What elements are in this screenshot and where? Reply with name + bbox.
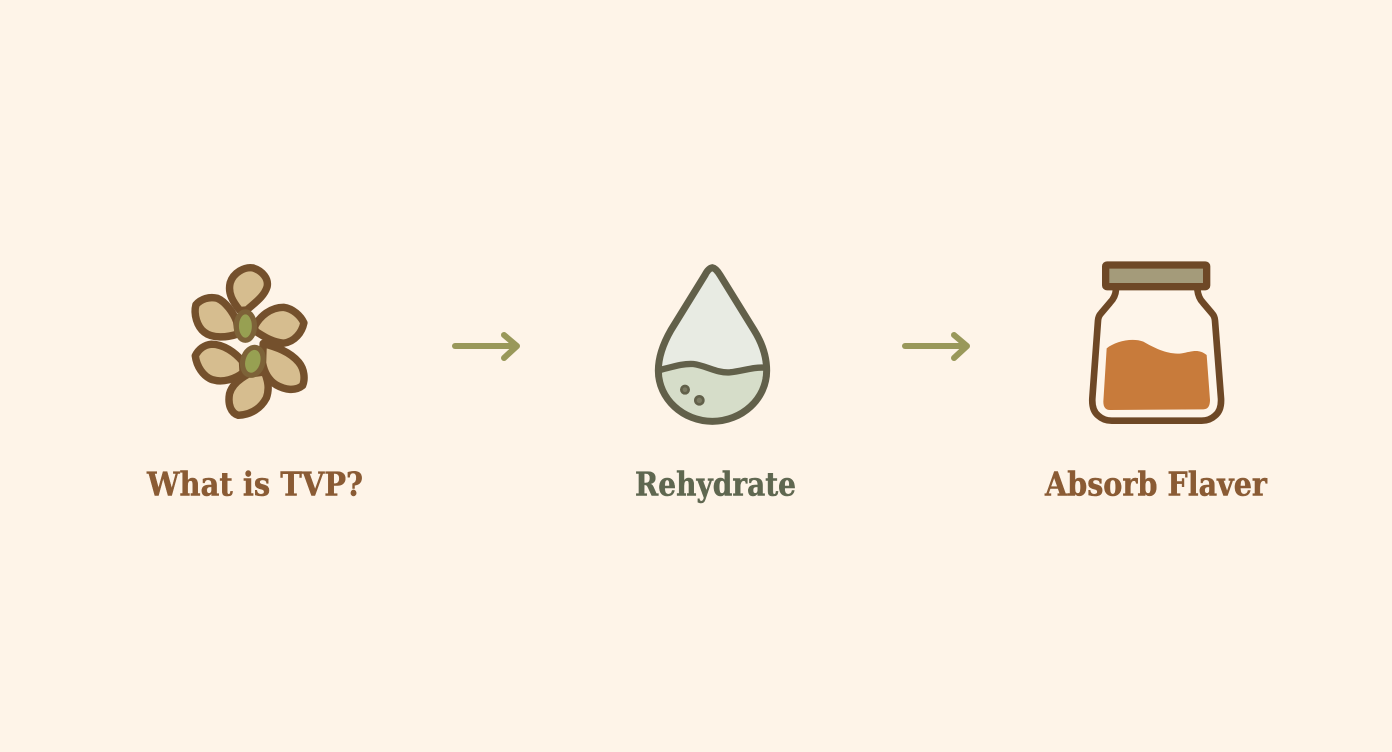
icon part: lower flower centre bbox=[239, 345, 266, 378]
icon: jar of flavor bbox=[1092, 265, 1221, 421]
arrow: first step to second bbox=[455, 335, 517, 358]
icon: water drop bbox=[658, 268, 767, 421]
icon: TVP soy flower bbox=[195, 268, 304, 415]
icon part: bubbles bbox=[681, 386, 703, 404]
step label: Rehydrate: Rehydrate bbox=[635, 464, 796, 504]
step label: Absorb Flaver: Absorb Flaver bbox=[1044, 464, 1268, 504]
icon part: upper flower centre bbox=[236, 312, 254, 340]
arrow: second step to third bbox=[905, 335, 967, 358]
step label: What is TVP?: What is TVP? bbox=[146, 464, 363, 504]
